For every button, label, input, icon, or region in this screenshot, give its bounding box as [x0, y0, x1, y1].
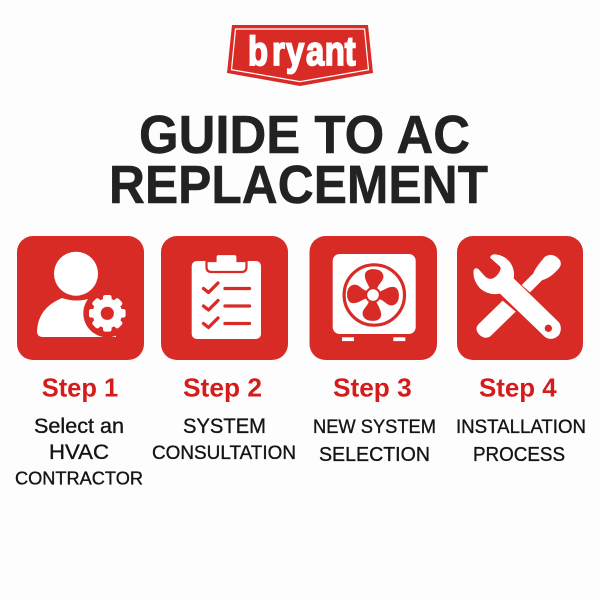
- step 4 description: [456, 416, 586, 466]
- icon: person head: [54, 252, 98, 296]
- title: REPLACEMENT: [109, 155, 488, 215]
- step 2 description: CONSULTATION: [152, 442, 296, 464]
- icon: checklist: [204, 283, 250, 328]
- step 1 description: Select an: [34, 415, 124, 438]
- icon: clipboard board: [192, 261, 261, 339]
- step 1 description: HVAC: [49, 441, 109, 464]
- title: GUIDE TO AC: [139, 105, 470, 165]
- step 4 description: INSTALLATION: [456, 416, 586, 438]
- panel: step 3 icon, outdoor AC unit: [310, 236, 437, 360]
- step 4 description: PROCESS: [473, 443, 565, 466]
- step 2 label: Step 2: [183, 373, 262, 403]
- icon: gear: [89, 295, 126, 332]
- icon: unit body: [333, 254, 416, 334]
- icon: fan ring: [344, 265, 404, 325]
- step 1 description: [15, 415, 143, 488]
- panel: step 2 icon, clipboard: [161, 236, 288, 360]
- step 3 description: [313, 416, 436, 466]
- icon: fan blades: [347, 269, 399, 321]
- step 3 description: NEW SYSTEM: [313, 416, 436, 438]
- step 1 label: Step 1: [42, 373, 118, 403]
- step 1 description: CONTRACTOR: [15, 468, 143, 488]
- icon: wrench: [473, 254, 561, 339]
- panel: step 4 icon, wrench and screwdriver: [457, 236, 583, 360]
- icon: clipboard clip: [206, 254, 246, 272]
- panel: step 1 icon, contractor with gear: [17, 236, 144, 360]
- step 4 label: Step 4: [479, 373, 557, 403]
- icon: fan hub: [367, 289, 379, 301]
- step 3 label: Step 3: [333, 373, 412, 403]
- icon: gear halo: [83, 289, 131, 337]
- icon: unit feet: [342, 337, 405, 341]
- step 2 description: SYSTEM: [183, 415, 266, 438]
- icon: head gap: [51, 249, 101, 299]
- title: [109, 105, 488, 215]
- icon: person shoulders: [37, 298, 116, 337]
- step 2 description: [152, 415, 296, 464]
- step 3 description: SELECTION: [319, 443, 430, 466]
- icon: screwdriver: [476, 255, 561, 338]
- logo: bryant: bryant: [248, 27, 356, 74]
- logo: bryant: [227, 25, 373, 86]
